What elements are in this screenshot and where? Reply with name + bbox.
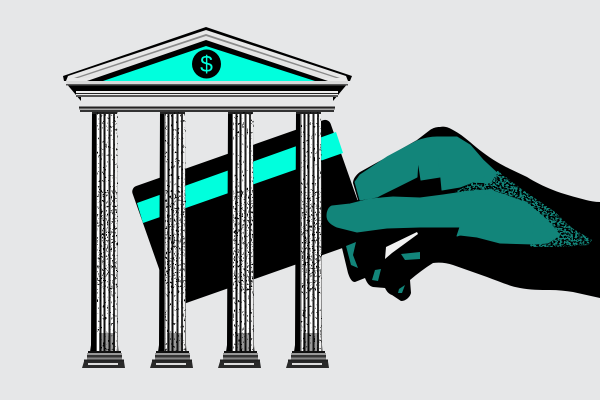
hand silhouette	[325, 127, 600, 301]
lower finger highlights	[346, 242, 420, 293]
gap between fingers	[385, 232, 418, 259]
card stripe	[137, 132, 343, 223]
dollar badge	[192, 50, 221, 78]
columns	[82, 112, 329, 368]
bank building	[63, 27, 352, 368]
dappled shading	[455, 170, 592, 247]
pointing finger highlight	[327, 190, 560, 244]
pediment teal panel	[103, 46, 315, 81]
dollar badge: $	[200, 51, 213, 77]
hand	[325, 127, 600, 301]
back of hand highlight	[355, 137, 497, 200]
column stipple	[97, 112, 322, 352]
entablature	[66, 81, 348, 112]
pediment	[63, 27, 352, 81]
credit card	[131, 118, 371, 308]
column shading	[97, 190, 321, 290]
